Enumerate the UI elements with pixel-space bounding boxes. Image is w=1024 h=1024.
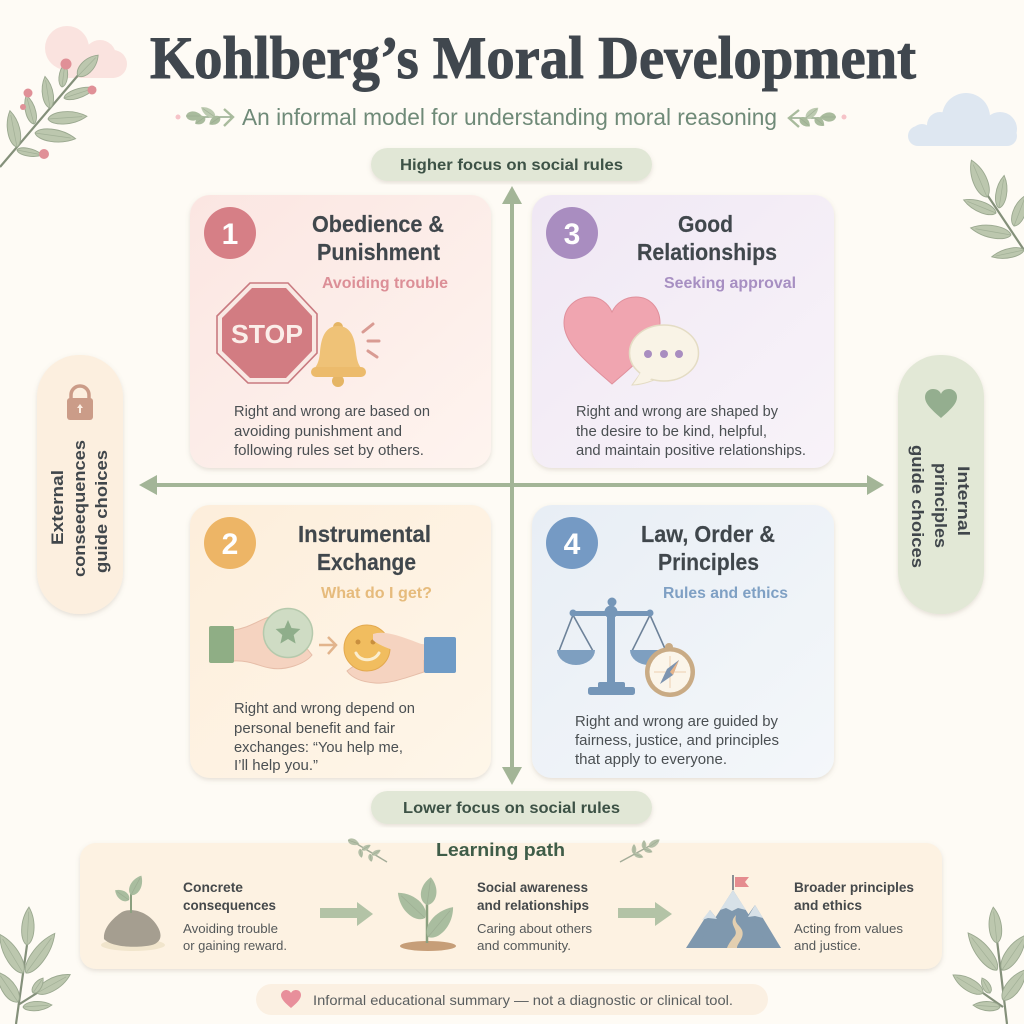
- text: step 2: and relationships: [477, 898, 589, 913]
- badge 2: [204, 517, 256, 569]
- panel: stage 4: [532, 505, 834, 778]
- panel: internal principles: [898, 355, 984, 614]
- subheading: stage 3: Seeking approval: [664, 275, 796, 292]
- text: step 1: or gaining reward.: [183, 939, 287, 953]
- description: stage 4: that apply to everyone.: [575, 752, 727, 768]
- panel: external consequences: External: [48, 470, 67, 545]
- description: stage 4: [575, 714, 779, 768]
- description: stage 4: Right and wrong are guided by: [575, 714, 779, 730]
- panel: learning path: [80, 837, 942, 969]
- badge 1: [204, 207, 256, 259]
- subheading: stage 4: Rules and ethics: [663, 585, 788, 602]
- badge 3: [546, 207, 598, 259]
- text: step 3: [794, 880, 914, 953]
- ornament: left sprig: [347, 837, 387, 862]
- icon: heart: [925, 389, 957, 418]
- icon: giving hand with star coin: [209, 608, 312, 669]
- text: step 2: and community.: [477, 939, 571, 953]
- panel: external consequences: [37, 355, 123, 614]
- footer note: Informal educational summary — not a diagnostic or clinical tool.: [313, 992, 733, 1008]
- heading: stage 3: [637, 211, 777, 265]
- icon: stop sign: [217, 283, 317, 383]
- icon: heart: [564, 297, 660, 384]
- axis: horizontal arrow: [139, 475, 884, 495]
- heading: stage 4: [641, 521, 775, 575]
- panel: internal principles: guide choices: [908, 445, 927, 568]
- text: step 2: Caring about others: [477, 922, 592, 936]
- heading: stage 3: Good: [678, 211, 733, 237]
- decoration: pink cloud: [45, 26, 127, 78]
- panel: stage 3: [532, 195, 834, 468]
- description: stage 2: I’ll help you.”: [234, 758, 318, 774]
- decoration: bottom-right branch: [950, 907, 1024, 1024]
- badge 1: 1: [222, 218, 238, 251]
- panel: external consequences: guide choices: [92, 450, 111, 573]
- heading: stage 1: [312, 211, 444, 265]
- axis: vertical arrow: [502, 186, 522, 785]
- ornament: right sprig: [620, 837, 661, 862]
- pill: higher focus: Higher focus on social rules: [400, 157, 623, 174]
- description: stage 2: exchanges: “You help me,: [234, 740, 403, 756]
- description: stage 1: avoiding punishment and: [234, 424, 402, 440]
- text: step 2: Social awareness: [477, 880, 588, 895]
- icon: lock: [67, 386, 93, 420]
- badge 4: 4: [564, 528, 581, 561]
- description: stage 3: and maintain positive relationships.: [576, 443, 806, 459]
- text: step 1: [183, 880, 287, 953]
- description: stage 1: [234, 404, 430, 459]
- text: step 3: and justice.: [794, 939, 861, 953]
- icon: receiving hand with smiley coin: [344, 625, 456, 683]
- heading: stage 4: Principles: [658, 549, 759, 575]
- subtitle: An informal model for understanding moral reasoning: [242, 104, 777, 130]
- description: stage 3: the desire to be kind, helpful,: [576, 424, 767, 440]
- description: stage 2: personal benefit and fair: [234, 721, 395, 737]
- badge 3: 3: [564, 218, 580, 251]
- decoration: bottom-left branch: [0, 907, 73, 1024]
- pill: higher focus: [371, 148, 652, 181]
- title: Kohlberg’s Moral Development: [150, 25, 916, 91]
- icon: growing plant: [392, 876, 460, 951]
- heading: stage 1: Punishment: [317, 239, 440, 265]
- text: step 1: consequences: [183, 898, 276, 913]
- subheading: stage 2: What do I get?: [321, 585, 432, 602]
- arrow: step 2 to 3: [618, 902, 672, 926]
- subheading: stage 1: Avoiding trouble: [322, 275, 448, 292]
- text: step 1: Concrete: [183, 880, 244, 895]
- icon: mountain with flag: [686, 875, 781, 948]
- ornament: subtitle left sprig: [176, 104, 233, 128]
- icon: speech bubble: [630, 325, 698, 385]
- heading: stage 2: [298, 521, 431, 575]
- text: step 3: Acting from values: [794, 922, 903, 936]
- decoration: top-right branch: [962, 157, 1024, 261]
- panel: stage 2: [190, 505, 491, 778]
- panel: stage 1: [190, 195, 491, 468]
- icon: compass: [645, 643, 695, 697]
- text: step 3: and ethics: [794, 898, 862, 913]
- heading: stage 2: Exchange: [317, 549, 416, 575]
- heading: stage 1: Obedience &: [312, 211, 444, 237]
- icon: scales: [557, 598, 668, 695]
- text: step 2: [477, 880, 592, 953]
- icon: rock with sprout: [101, 873, 165, 951]
- description: stage 3: [576, 404, 806, 459]
- icon: stop sign: STOP: [231, 319, 303, 349]
- panel: internal principles: principles: [931, 463, 950, 548]
- icon: exchange arrow: [319, 637, 336, 654]
- pill: lower focus: [371, 791, 652, 824]
- heading: stage 2: Instrumental: [298, 521, 431, 547]
- icon: bell: [311, 322, 379, 387]
- text: step 3: Broader principles: [794, 880, 914, 895]
- pill: lower focus: Lower focus on social rules: [403, 800, 620, 817]
- text: step 1: Avoiding trouble: [183, 922, 278, 936]
- arrow: step 1 to 2: [320, 902, 373, 926]
- panel: external consequences: conseequences: [70, 440, 89, 577]
- ornament: subtitle right sprig: [789, 105, 846, 129]
- heading: learning path: Learning path: [436, 839, 565, 860]
- panel: internal principles: Internal: [954, 466, 973, 536]
- icon: footer heart: [281, 990, 301, 1008]
- footer note: [256, 984, 768, 1015]
- heading: stage 3: Relationships: [637, 239, 777, 265]
- badge 2: 2: [222, 528, 238, 561]
- description: stage 3: Right and wrong are shaped by: [576, 404, 779, 420]
- decoration: top-left branch: [0, 51, 103, 167]
- description: stage 2: [234, 701, 415, 774]
- badge 4: [546, 517, 598, 569]
- decoration: blue cloud: [908, 93, 1017, 146]
- description: stage 1: Right and wrong are based on: [234, 404, 430, 420]
- description: stage 4: fairness, justice, and principles: [575, 733, 779, 749]
- description: stage 2: Right and wrong depend on: [234, 701, 415, 717]
- description: stage 1: following rules set by others.: [234, 443, 424, 459]
- heading: stage 4: Law, Order &: [641, 521, 775, 547]
